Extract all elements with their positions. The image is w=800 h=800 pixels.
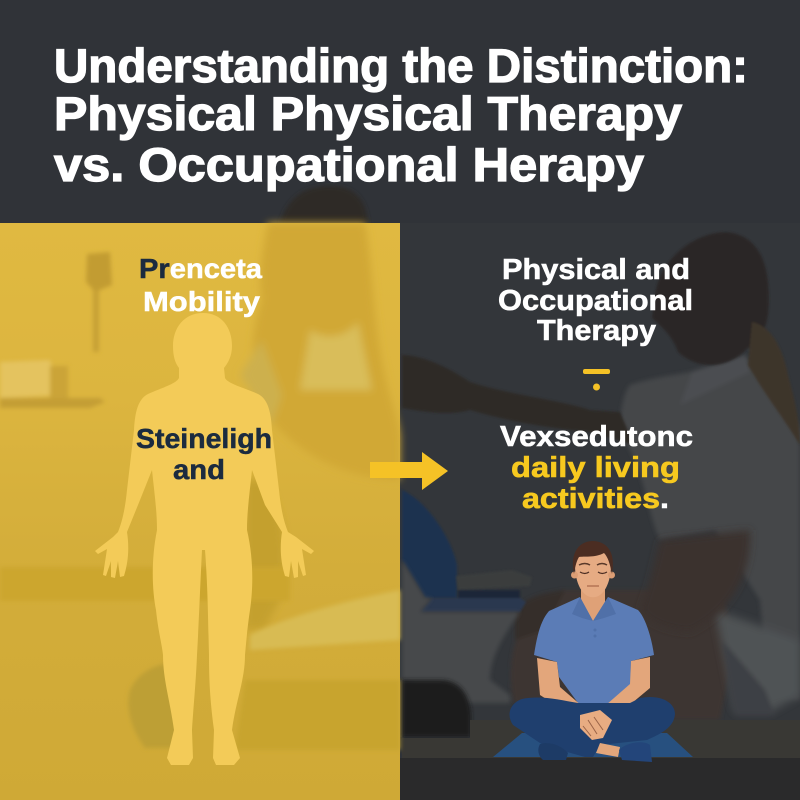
head	[571, 541, 615, 597]
neck	[581, 585, 605, 622]
tinted standing figure	[240, 223, 400, 630]
text: Physical and Occupational Therapy	[498, 254, 693, 347]
photo: faint figure behind title	[280, 186, 368, 223]
text: Physical and Occupational Therapy: Physical and	[502, 254, 690, 286]
ankle and shoes	[596, 743, 620, 757]
shirt	[534, 597, 654, 703]
panel: yellow physical therapy side	[0, 223, 400, 800]
text: daily living activities: activities .	[522, 483, 669, 515]
mat	[493, 733, 693, 757]
photo: white sheet	[402, 560, 520, 703]
title	[54, 39, 748, 191]
arrow	[370, 452, 448, 490]
photo: floor	[402, 720, 800, 758]
text: Steineligh and: and	[173, 454, 225, 485]
legs	[510, 697, 675, 757]
therapist thigh and seat	[511, 590, 735, 720]
photo: tinted room details	[0, 223, 400, 750]
hands	[580, 710, 612, 740]
icon: body silhouette	[95, 313, 314, 765]
text: Physical and Occupational Therapy: Therapy	[537, 315, 656, 347]
photo: equipment tray	[420, 570, 532, 612]
text: daily living activities: daily living	[511, 452, 680, 484]
photo: therapist seated in profile	[402, 232, 800, 720]
title: Understanding the Distinction:	[54, 39, 748, 92]
photo: dark stool	[402, 680, 471, 737]
text: Prenceta Mobility: Mobility	[143, 286, 260, 317]
therapist arm and hand	[402, 355, 634, 445]
text: Physical and Occupational Therapy: Occupational	[498, 285, 693, 317]
therapist lower arm	[640, 530, 750, 632]
text: Prenceta Mobility: Prenceta	[139, 253, 262, 284]
tinted floor band and roll	[0, 567, 400, 750]
icon: seated man meditating	[493, 541, 693, 762]
text: Steineligh and: Steineligh	[136, 423, 272, 454]
icon: dash and dot divider	[583, 369, 610, 390]
arms	[537, 657, 650, 724]
title: Physical Physical Therapy	[54, 87, 682, 140]
therapist head and hair	[652, 232, 800, 445]
photo: blue cushion	[402, 490, 457, 598]
text: Prenceta Mobility	[139, 253, 262, 317]
title: vs. Occupational Herapy	[54, 138, 644, 191]
therapist shirt	[618, 355, 800, 715]
text: Steineligh and	[136, 423, 272, 485]
text: daily living activities	[500, 421, 693, 515]
text: daily living activities: Vexsedutonc	[500, 421, 693, 453]
collar and buttons	[572, 597, 616, 638]
